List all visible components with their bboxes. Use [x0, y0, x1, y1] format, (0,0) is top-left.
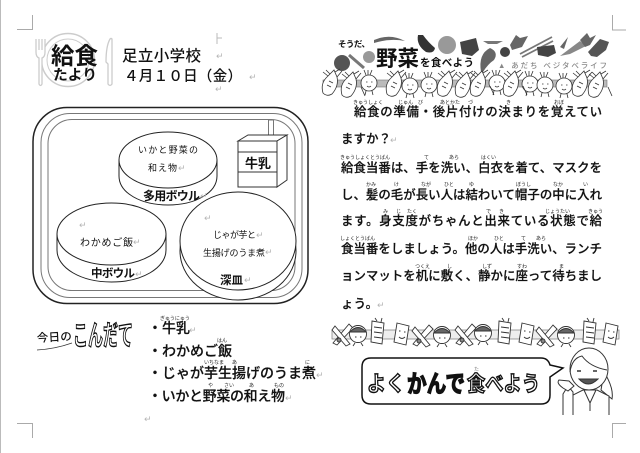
- vegetable campaign banner: ▲ あだち ベジタベライフ: [498, 61, 607, 70]
- body text: lunch duty rules: ょう。: [341, 297, 378, 311]
- speech bubble: chew well: [362, 358, 563, 404]
- menu list: ↵: [189, 326, 197, 336]
- furigana: び: [418, 99, 423, 106]
- vegetable campaign banner: [334, 33, 609, 72]
- furigana: なが: [421, 181, 431, 188]
- multi-purpose bowl: いかと野菜の: [138, 144, 198, 155]
- speech bubble: chew well: よく: [367, 373, 405, 396]
- body text: lunch duty rules: ↵: [390, 136, 398, 146]
- menu list: に: [305, 360, 310, 366]
- furigana: なか: [553, 181, 563, 188]
- menu list: ぎゅうにゅう: [160, 315, 190, 322]
- school name and date: ↵: [249, 73, 257, 83]
- menu list: ・いかと野菜の和え物: [148, 388, 285, 404]
- menu list: はん: [217, 338, 227, 344]
- menu list: [144, 315, 324, 425]
- furigana: て: [424, 155, 429, 161]
- todays menu heading: 今日の: [36, 329, 72, 345]
- deep plate: ↵: [265, 248, 273, 258]
- furigana: たく: [407, 209, 417, 215]
- deep plate: 深皿: [220, 273, 244, 287]
- furigana: あら: [536, 236, 546, 242]
- deep plate: ↵: [244, 276, 252, 286]
- deep plate: [180, 192, 296, 300]
- medium bowl: わかめご飯: [80, 236, 133, 249]
- furigana: け: [394, 182, 399, 188]
- vegetable campaign banner: を食べよう: [420, 56, 474, 69]
- medium bowl: 中ボウル: [91, 266, 136, 280]
- furigana: かみ: [366, 181, 376, 188]
- furigana: ゆ: [469, 182, 474, 188]
- menu list: や: [208, 382, 213, 389]
- decorative tableware border: [332, 318, 619, 347]
- furigana: で: [486, 209, 491, 215]
- school name and date: [122, 33, 257, 95]
- furigana: じょうたい: [545, 209, 570, 215]
- menu list: ・牛乳: [148, 320, 190, 336]
- medium bowl: [57, 203, 166, 282]
- multi-purpose bowl: ↵: [200, 192, 208, 202]
- deep plate: ↵: [256, 231, 264, 241]
- page edge: [0, 0, 1, 453]
- multi-purpose bowl: 多用ボウル: [143, 188, 200, 203]
- body text: lunch duty rules: し、髪の毛が長い人は結わいて帽子の中に入れ: [341, 187, 603, 202]
- menu list: ・わかめご飯: [148, 343, 232, 359]
- todays menu heading: こんだて: [73, 321, 133, 352]
- multi-purpose bowl: ↵: [178, 164, 186, 174]
- milk carton: 牛乳: [245, 156, 271, 171]
- furigana: きゅうしょく: [353, 99, 383, 106]
- menu list: あ: [232, 360, 237, 366]
- furigana: つくえ: [415, 264, 430, 270]
- menu list: さい: [224, 382, 234, 389]
- furigana: し: [447, 264, 452, 270]
- furigana: あとかた: [440, 99, 460, 106]
- furigana: じ: [396, 209, 401, 215]
- vegetables: [334, 33, 609, 72]
- menu list: あ: [249, 383, 254, 389]
- school name and date: ４月１０日（金）: [124, 68, 242, 85]
- school name and date: 足立小学校: [122, 47, 201, 65]
- school name and date: ↵: [215, 85, 223, 95]
- furigana: ま: [559, 264, 564, 270]
- furigana: ひと: [494, 236, 504, 242]
- furigana: しず: [482, 263, 492, 270]
- multi-purpose bowl: [119, 132, 217, 205]
- body text: lunch duty rules: 給食当番は、手を洗い、白衣を着て、マスクを: [341, 160, 602, 175]
- furigana: すわ: [517, 263, 527, 270]
- deep plate: じゃが芋と: [213, 229, 256, 240]
- furigana: しょくとうばん: [340, 235, 375, 242]
- menu list: ・じゃが芋生揚げのうま煮: [148, 365, 316, 381]
- medium bowl: ↵: [79, 221, 87, 231]
- furigana: づ: [468, 99, 473, 106]
- school name and date: ↵: [216, 52, 224, 62]
- body text: lunch duty rules: ますか？: [341, 132, 391, 146]
- decorative vegetable border: [322, 69, 612, 98]
- icon: teacher character: [558, 348, 612, 415]
- furigana: おぼ: [554, 99, 564, 106]
- furigana: きゅう: [588, 208, 603, 215]
- medium bowl: ↵: [133, 238, 141, 248]
- furigana: ひと: [444, 182, 454, 188]
- menu list: もの: [274, 383, 284, 389]
- logo: school lunch newsletter: たより: [53, 67, 97, 84]
- speech bubble: chew well: 食べよう: [467, 373, 540, 396]
- body text: lunch duty rules: 食当番をしましょう。他の人は手洗い、ランチ: [341, 241, 602, 256]
- body text: lunch duty rules: ます。身支度がちゃんと出来ている状態で給: [341, 213, 603, 228]
- lunch tray: [33, 108, 308, 304]
- logo: school lunch newsletter: [36, 34, 112, 86]
- furigana: じゅん: [398, 100, 413, 106]
- furigana: き: [506, 99, 511, 106]
- todays menu heading: [36, 321, 133, 352]
- furigana: きゅうしょくとうばん: [340, 154, 390, 161]
- menu list: ↵: [316, 371, 324, 381]
- logo: school lunch newsletter: 給食: [51, 43, 98, 69]
- milk carton: [238, 120, 287, 187]
- body text: lunch duty rules: 給食の準備・後片付けの決まりを覚えてい: [354, 104, 602, 119]
- body text: lunch duty rules: [340, 99, 603, 311]
- speech bubble: chew well: た: [474, 367, 479, 373]
- vegetable campaign banner: そうだ、: [338, 39, 370, 49]
- menu list: ↵: [285, 394, 293, 404]
- body text: lunch duty rules: ↵: [377, 301, 385, 311]
- furigana: ぼうし: [516, 181, 531, 188]
- multi-purpose bowl: 和え物: [148, 162, 177, 173]
- deep plate: ↵: [204, 214, 212, 224]
- furigana: い: [583, 182, 588, 188]
- speech bubble: chew well: かんで: [407, 371, 465, 398]
- vegetable campaign banner: 野菜: [376, 47, 419, 71]
- body text: lunch duty rules: ョンマットを机に敷く、静かに座って待ちまし: [341, 268, 602, 283]
- deep plate: 生揚げのうま煮: [203, 247, 265, 258]
- medium bowl: ↵: [135, 270, 143, 280]
- furigana: はくい: [481, 155, 496, 161]
- furigana: き: [499, 208, 504, 215]
- furigana: て: [521, 236, 526, 242]
- furigana: ほか: [468, 235, 478, 242]
- menu list: ↵: [144, 415, 152, 425]
- furigana: [340, 99, 603, 270]
- furigana: み: [383, 209, 388, 215]
- menu list: いちなま: [204, 359, 224, 366]
- furigana: あら: [449, 155, 459, 161]
